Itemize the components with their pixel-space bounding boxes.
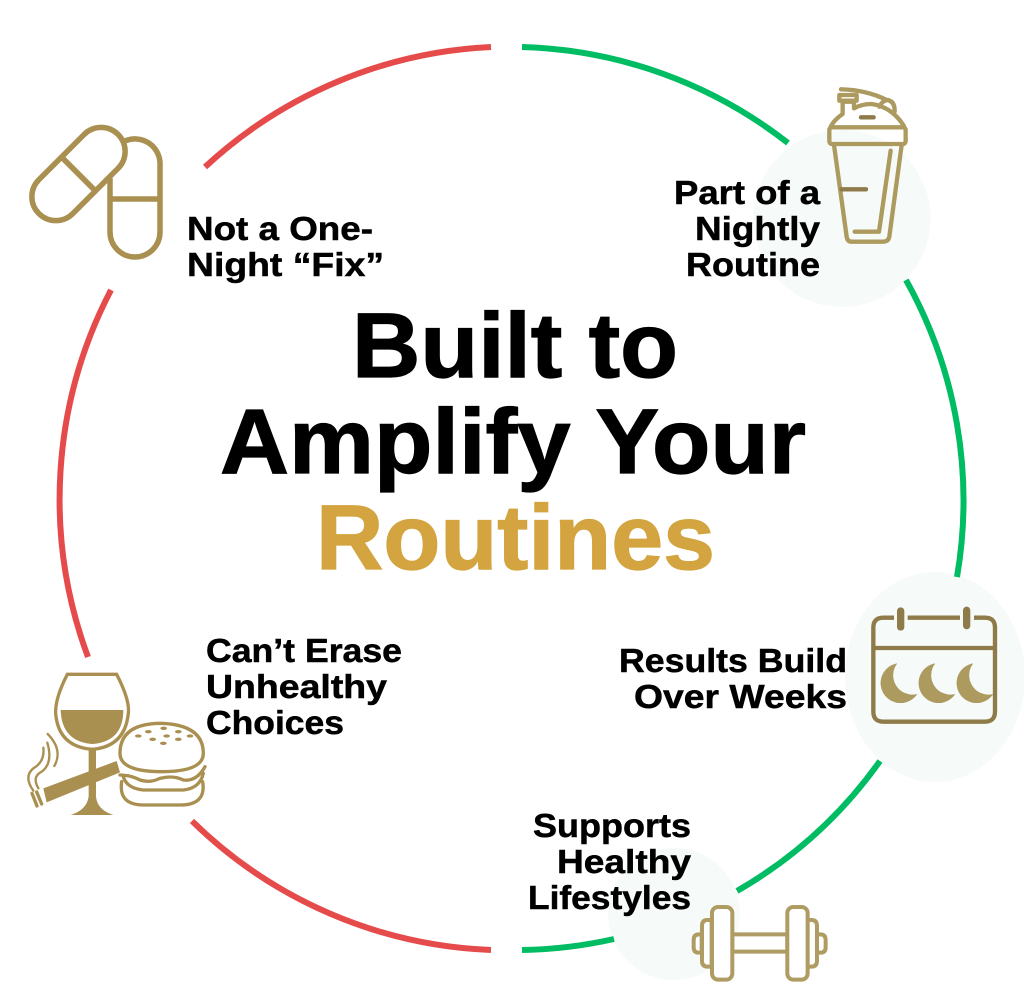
label: Can't Erase Unhealthy Choices: Unhealthy <box>206 668 388 705</box>
icon: calendar with moons <box>873 607 995 722</box>
title: Routines <box>316 487 715 589</box>
title: Built to <box>352 295 678 397</box>
background ellipse: calendar <box>845 572 1024 782</box>
label: Supports Healthy Lifestyles: Healthy <box>557 843 692 880</box>
icon: wine, cigarette and burger <box>28 674 205 815</box>
icon: pills <box>22 117 160 257</box>
background circle: dumbbell <box>608 848 740 980</box>
label: Supports Healthy Lifestyles: Supports <box>533 807 691 844</box>
label: Results Build Over Weeks: Over Weeks <box>634 678 847 715</box>
label: Part of a Nightly Routine: Nightly <box>695 210 821 247</box>
label: Can't Erase Unhealthy Choices: Can’t Erase <box>206 632 402 669</box>
background circle: shaker <box>754 130 930 307</box>
icon: dumbbell <box>694 907 826 980</box>
title <box>220 295 806 589</box>
label: Supports Healthy Lifestyles: Lifestyles <box>528 879 691 916</box>
label: Not a One-Night Fix: Not a One- <box>187 210 373 247</box>
label: Part of a Nightly Routine: Part of a <box>674 174 821 211</box>
label: Results Build Over Weeks <box>619 642 847 715</box>
green arc segments <box>522 47 963 950</box>
label: Part of a Nightly Routine <box>674 174 821 283</box>
label: Part of a Nightly Routine: Routine <box>686 246 820 283</box>
red arc segments <box>60 47 491 950</box>
icon: shaker bottle <box>829 89 906 242</box>
label: Not a One-Night Fix <box>187 210 384 283</box>
label: Can't Erase Unhealthy Choices <box>206 632 402 741</box>
label: Supports Healthy Lifestyles <box>528 807 692 916</box>
label: Not a One-Night Fix: Night “Fix” <box>187 246 384 283</box>
label: Results Build Over Weeks: Results Build <box>619 642 847 679</box>
label: Can't Erase Unhealthy Choices: Choices <box>206 704 344 741</box>
title: Amplify Your <box>220 391 806 493</box>
